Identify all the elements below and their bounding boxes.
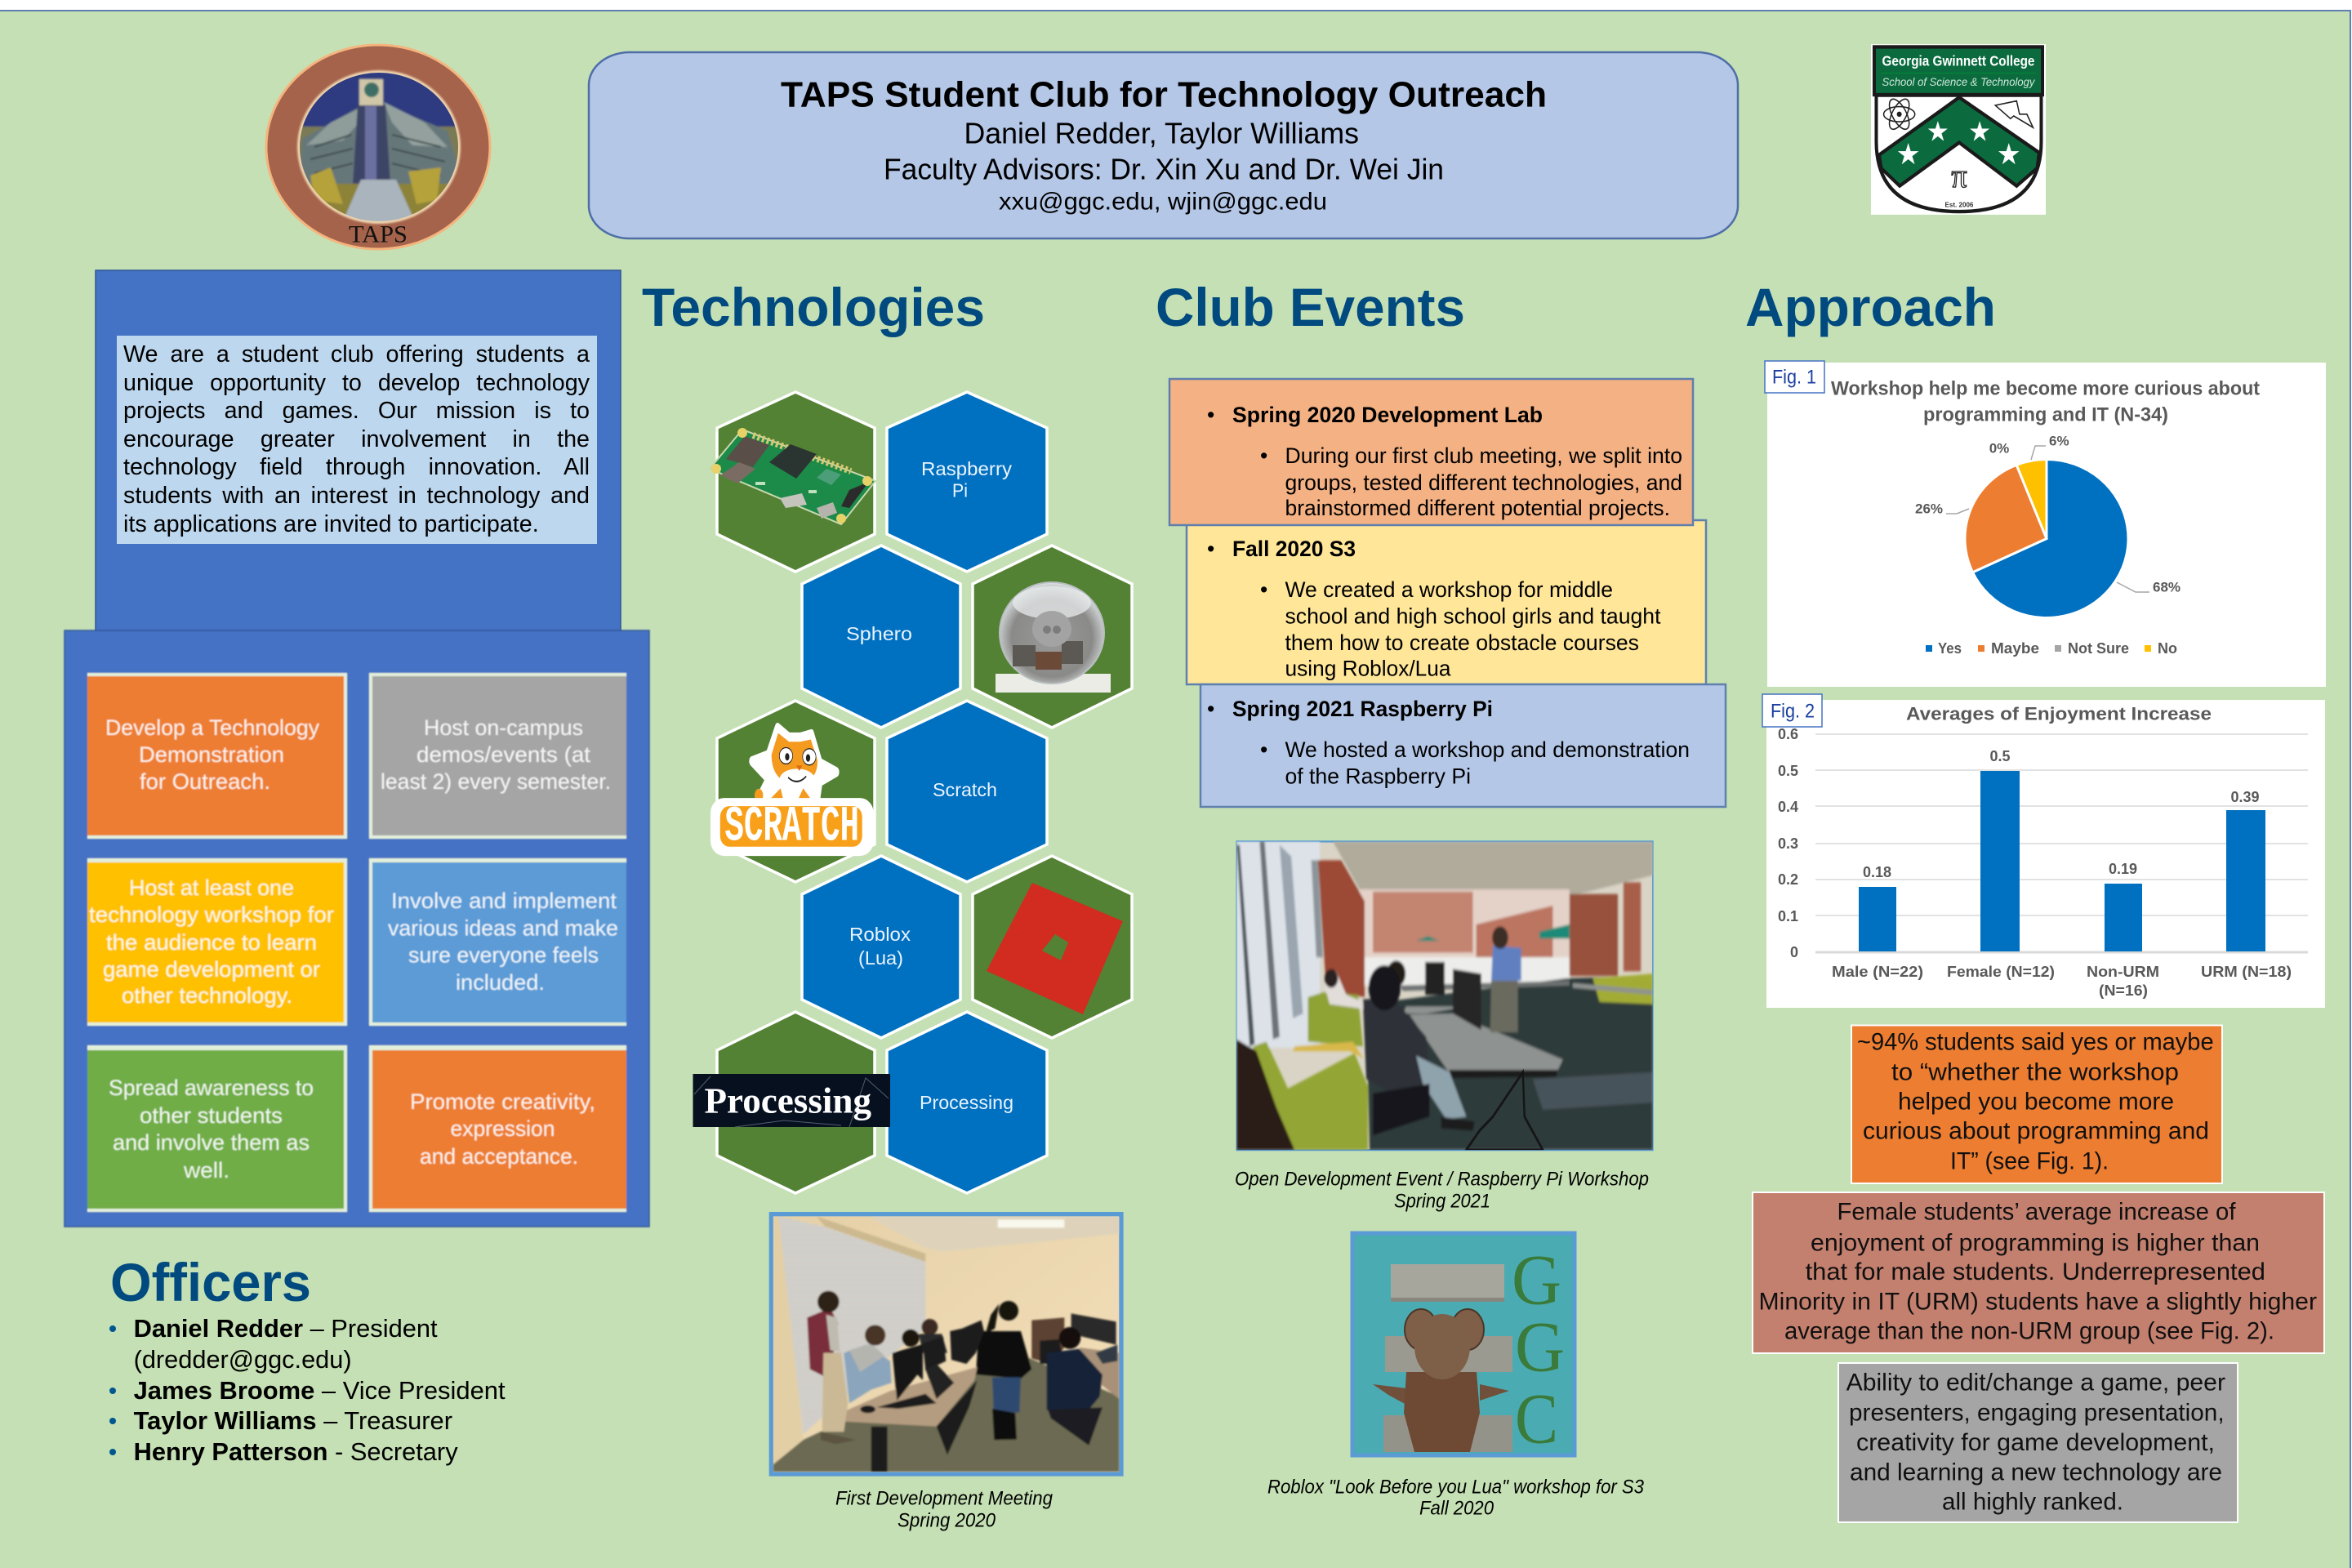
mission statement text: technology field through innovation. All — [123, 454, 590, 480]
logo: Georgia Gwinnett College shield: ★ — [1927, 115, 1949, 148]
goal card: host workshop: the audience to learn — [106, 930, 317, 955]
logo: Georgia Gwinnett College shield: ★ — [1997, 138, 2021, 172]
goal card: host workshop — [87, 858, 347, 1026]
event box: Spring 2020: groups, tested different technologies, and — [1285, 470, 1682, 495]
goal card: involve ideas — [369, 858, 626, 1026]
y axis labels: 0.3 — [1778, 835, 1798, 852]
goal card: spread awareness: other students — [140, 1103, 283, 1128]
result callout: female and URM: that for male students. Underrepresented — [1806, 1258, 2265, 1285]
result callout: 94 percent: ~94% students said yes or maybe — [1857, 1029, 2214, 1055]
result callout: highly ranked: all highly ranked. — [1942, 1488, 2123, 1516]
goal card: promote creativity — [369, 1045, 626, 1212]
mission statement text: unique opportunity to develop technology — [123, 370, 590, 396]
heading: Approach: Approach — [1745, 277, 1996, 337]
mission statement text: encourage greater involvement in the — [123, 426, 590, 452]
legend: Not Sure — [2068, 640, 2129, 657]
result callout: highly ranked: Ability to edit/change a game, peer — [1846, 1369, 2225, 1396]
authors: Daniel Redder, Taylor Williams — [964, 116, 1359, 150]
emblem label: TAPS — [349, 220, 408, 248]
hexagon: Roblox label: (Lua) — [858, 947, 903, 969]
legend — [1926, 640, 2177, 657]
event box: Fall 2020 S3: • — [1260, 577, 1267, 602]
caption: open development — [1235, 1168, 1649, 1212]
category labels: URM (N=18) — [2201, 964, 2292, 980]
heading: Technologies: Technologies — [642, 277, 985, 337]
hexagon: Scratch label: Scratch — [933, 779, 997, 800]
hexagon: Roblox label — [802, 856, 960, 1038]
heading: Officers: Officers — [110, 1252, 311, 1312]
goal card: involve ideas: Involve and implement — [391, 889, 617, 913]
bar chart: Fig. 2 — [1766, 700, 2325, 1008]
chart title: Averages of Enjoyment Increase — [1906, 704, 2212, 724]
icon: Processing banner: Processing — [704, 1081, 871, 1120]
event box: Fall 2020 S3: school and high school girls and taught — [1285, 604, 1661, 629]
result callout: 94 percent — [1851, 1026, 2222, 1183]
GGC letters: G — [1515, 1308, 1565, 1387]
officers block — [109, 1252, 506, 1466]
logo: Georgia Gwinnett College shield: ★ — [1896, 138, 1921, 172]
hexagon: Raspberry Pi picture — [717, 392, 875, 572]
event box: Fall 2020 S3: • — [1207, 537, 1214, 561]
leader lines — [1946, 446, 2149, 592]
result callout: 94 percent: IT” (see Fig. 1). — [1950, 1148, 2109, 1174]
result callout: female and URM — [1753, 1192, 2324, 1353]
bar value labels: 0.39 — [2230, 789, 2260, 805]
goal card: host demos: Host on-campus — [424, 715, 583, 740]
event box: Spring 2020: Spring 2020 Development Lab — [1232, 403, 1543, 427]
event box: Spring 2020: • — [1260, 443, 1267, 468]
hexagon: Processing picture — [717, 1012, 875, 1193]
tag: Fig. 1 — [1765, 361, 1824, 393]
bar value labels: 0.19 — [2109, 861, 2137, 877]
logo: Georgia Gwinnett College shield: π — [1951, 158, 1967, 195]
officer list: Taylor Williams – Treasurer — [134, 1407, 452, 1435]
photo: first development meeting — [771, 1214, 1121, 1474]
mission statement text: We are a student club offering students a — [123, 341, 590, 368]
bar value labels — [1863, 748, 2260, 880]
event box: Fall 2020 S3: We created a workshop for middle — [1285, 577, 1613, 602]
panel: club events — [1169, 379, 1726, 807]
pie labels — [1915, 433, 2180, 595]
event box: Spring 2020: • — [1207, 403, 1214, 427]
event box: Fall 2020 S3: using Roblox/Lua — [1285, 657, 1451, 681]
mission statement text: its applications are invited to participate. — [123, 511, 539, 537]
event box: Fall 2020 S3 — [1187, 520, 1706, 684]
pie labels: 6% — [2049, 433, 2069, 449]
tag: Fig. 2 — [1762, 694, 1822, 727]
goal card: involve ideas: various ideas and make — [388, 916, 618, 941]
event box: Fall 2020 S3: them how to create obstacle courses — [1285, 630, 1639, 655]
y axis labels: 0.2 — [1778, 871, 1798, 888]
pie labels: 0% — [1989, 441, 2009, 456]
y axis labels: 0.1 — [1778, 908, 1798, 924]
event box: Spring 2021: of the Raspberry Pi — [1285, 764, 1471, 789]
event box: Spring 2021: • — [1207, 697, 1214, 721]
hexagon: Raspberry Pi label: Raspberry — [921, 458, 1013, 479]
technology hexagon grid — [717, 392, 1132, 1193]
pie labels: 26% — [1915, 501, 1943, 516]
icon: Processing banner — [693, 1074, 890, 1127]
goal card: spread awareness: Spread awareness to — [109, 1076, 314, 1100]
title panel — [589, 52, 1738, 238]
pie chart: Fig. 1 — [1767, 363, 2326, 687]
GGC letters — [1512, 1241, 1565, 1459]
y axis labels: 0.5 — [1778, 763, 1798, 779]
logo: Georgia Gwinnett College shield: Georgia Gwinnett College — [1882, 53, 2034, 69]
result callout: female and URM: average than the non-URM group (see Fig. 2). — [1784, 1318, 2274, 1344]
bar value labels: 0.18 — [1863, 864, 1891, 880]
GGC letters: G — [1512, 1241, 1561, 1320]
goal card: promote creativity: Promote creativity, — [410, 1089, 595, 1114]
category labels: Non-URM — [2087, 964, 2159, 980]
goal card: develop demonstration: Develop a Technology — [105, 715, 319, 740]
panel: mission background — [96, 270, 621, 634]
legend: Yes — [1938, 640, 1962, 657]
goal card: develop demonstration — [87, 673, 347, 839]
chart title — [1831, 377, 2260, 426]
caption: first meeting: First Development Meeting — [835, 1488, 1054, 1509]
chart title: programming and IT (N-34) — [1923, 403, 2168, 426]
panel: goals grid — [65, 630, 649, 1227]
logo: Georgia Gwinnett College shield — [1871, 44, 2046, 215]
pie labels: 68% — [2153, 580, 2180, 595]
pie slices — [1965, 459, 2128, 617]
hexagon: Sphero picture — [973, 546, 1132, 728]
hexagon: Processing label — [887, 1012, 1047, 1193]
caption: Roblox workshop: Fall 2020 — [1419, 1498, 1494, 1519]
icon: Raspberry Pi Zero board — [710, 428, 875, 524]
legend: No — [2158, 640, 2177, 657]
result callout: 94 percent: to “whether the workshop — [1891, 1058, 2179, 1086]
icon: Scratch cat logo: SCRATCH — [724, 799, 859, 855]
hexagon: Roblox label: Roblox — [849, 924, 911, 945]
officer list: (dredder@ggc.edu) — [134, 1346, 352, 1374]
faculty advisors: Faculty Advisors: Dr. Xin Xu and Dr. Wei Jin — [884, 152, 1444, 186]
goal card: host workshop: other technology. — [122, 983, 292, 1008]
logo: TAPS club emblem — [266, 45, 490, 249]
y axis labels: 0.6 — [1778, 726, 1798, 742]
goal card: host demos: demos/events (at — [416, 742, 591, 767]
event box: Spring 2020: brainstormed different potential projects. — [1285, 496, 1670, 520]
hexagon: Processing label: Processing — [920, 1092, 1013, 1113]
photo: open development event — [1236, 841, 1653, 1150]
goal card: promote creativity: and acceptance. — [420, 1144, 578, 1169]
goal card: spread awareness: and involve them as — [113, 1130, 310, 1155]
result callout: highly ranked: presenters, engaging presentation, — [1849, 1400, 2225, 1426]
GGC letters: C — [1515, 1380, 1558, 1459]
bar value labels: 0.5 — [1989, 748, 2011, 764]
icon: Sphero robot ball — [996, 582, 1111, 693]
y axis labels — [1778, 726, 1798, 960]
logo: Georgia Gwinnett College shield: ★ — [1968, 115, 1991, 148]
goal card: host workshop: Host at least one — [129, 875, 294, 900]
chart title: Workshop help me become more curious about — [1831, 377, 2260, 400]
hexagon: Sphero label: Sphero — [846, 623, 912, 644]
mission statement text — [123, 341, 590, 537]
tag: Fig. 2: Fig. 2 — [1771, 701, 1815, 722]
event box: Spring 2020: During our first club meeting, we split into — [1285, 443, 1682, 468]
goal card: develop demonstration: Demonstration — [139, 742, 284, 767]
hexagon: Raspberry Pi label: Pi — [952, 480, 968, 501]
category labels — [1832, 964, 2292, 999]
category labels: Male (N=22) — [1832, 964, 1923, 980]
event box: Spring 2020 — [1169, 379, 1693, 525]
caption: first meeting — [835, 1488, 1054, 1532]
goal card: involve ideas: sure everyone feels — [408, 942, 599, 967]
goal card: involve ideas: included. — [456, 970, 545, 995]
event box: Spring 2021: Spring 2021 Raspberry Pi — [1232, 697, 1493, 721]
hexagon: Sphero label — [802, 546, 960, 728]
caption: Roblox workshop: Roblox "Look Before you Lua" workshop for S3 — [1267, 1477, 1645, 1498]
officer list — [109, 1315, 506, 1466]
goal card: spread awareness — [87, 1045, 347, 1212]
legend: Maybe — [1991, 640, 2039, 657]
icon: Scratch cat logo — [710, 728, 874, 856]
hexagon: Raspberry Pi label — [887, 392, 1047, 572]
officer list: Daniel Redder – President — [134, 1315, 438, 1343]
hexagon: Roblox picture — [973, 856, 1132, 1038]
category labels: Female (N=12) — [1947, 964, 2055, 980]
goal card: host demos: least 2) every semester. — [381, 769, 611, 794]
event box: Spring 2021: • — [1260, 737, 1267, 762]
event box: Spring 2021 — [1200, 684, 1726, 807]
officer list: James Broome – Vice President — [134, 1377, 506, 1405]
tag: Fig. 1: Fig. 1 — [1772, 366, 1816, 389]
category labels: (N=16) — [2099, 982, 2148, 999]
hexagon: Scratch picture — [717, 701, 875, 882]
result callout: female and URM: Minority in IT (URM) students have a slightly higher — [1759, 1289, 2317, 1315]
goal card: spread awareness: well. — [183, 1158, 229, 1183]
contact emails: xxu@ggc.edu, wjin@ggc.edu — [999, 188, 1327, 216]
caption: first meeting: Spring 2020 — [898, 1509, 996, 1532]
logo: Georgia Gwinnett College shield: School of Science & Technology — [1882, 75, 2036, 88]
hexagon: Scratch label — [887, 701, 1047, 882]
goal card: host demos — [369, 673, 626, 839]
result callout: 94 percent: curious about programming and — [1863, 1117, 2209, 1145]
icon: Roblox logo — [987, 883, 1123, 1014]
goal card: promote creativity: expression — [451, 1116, 555, 1141]
y axis labels: 0.4 — [1778, 799, 1798, 815]
poster title: TAPS Student Club for Technology Outreach — [781, 75, 1547, 114]
caption: Roblox workshop — [1267, 1477, 1645, 1519]
event box: Spring 2021: We hosted a workshop and demonstration — [1285, 737, 1690, 762]
result callout: female and URM: Female students’ average increase of — [1838, 1199, 2236, 1225]
mission statement text: projects and games. Our mission is to — [123, 398, 590, 424]
result callout: female and URM: enjoyment of programming is higher than — [1811, 1230, 2260, 1256]
result callout: 94 percent: helped you become more — [1898, 1088, 2174, 1116]
goal card: develop demonstration: for Outreach. — [140, 769, 270, 794]
y axis labels: 0 — [1790, 944, 1798, 960]
result callout: highly ranked: and learning a new technology are — [1850, 1459, 2222, 1486]
officer list: Henry Patterson - Secretary — [134, 1438, 458, 1466]
mission statement text: students with an interest in technology and — [123, 483, 590, 509]
result callout: highly ranked — [1838, 1363, 2238, 1522]
result callout: highly ranked: creativity for game development, — [1856, 1429, 2215, 1456]
logo: Georgia Gwinnett College shield: Est. 2006 — [1945, 200, 1974, 209]
caption: open development: Open Development Event / Raspberry Pi Workshop — [1235, 1168, 1649, 1191]
bars — [1859, 771, 2265, 951]
caption: open development: Spring 2021 — [1394, 1191, 1490, 1212]
goal card: host workshop: game development or — [103, 957, 320, 982]
event box: Fall 2020 S3: Fall 2020 S3 — [1232, 537, 1356, 561]
heading: Club Events: Club Events — [1156, 277, 1465, 337]
goal card: host workshop: technology workshop for — [89, 902, 334, 927]
image: Roblox bear game screenshot — [1352, 1233, 1575, 1459]
